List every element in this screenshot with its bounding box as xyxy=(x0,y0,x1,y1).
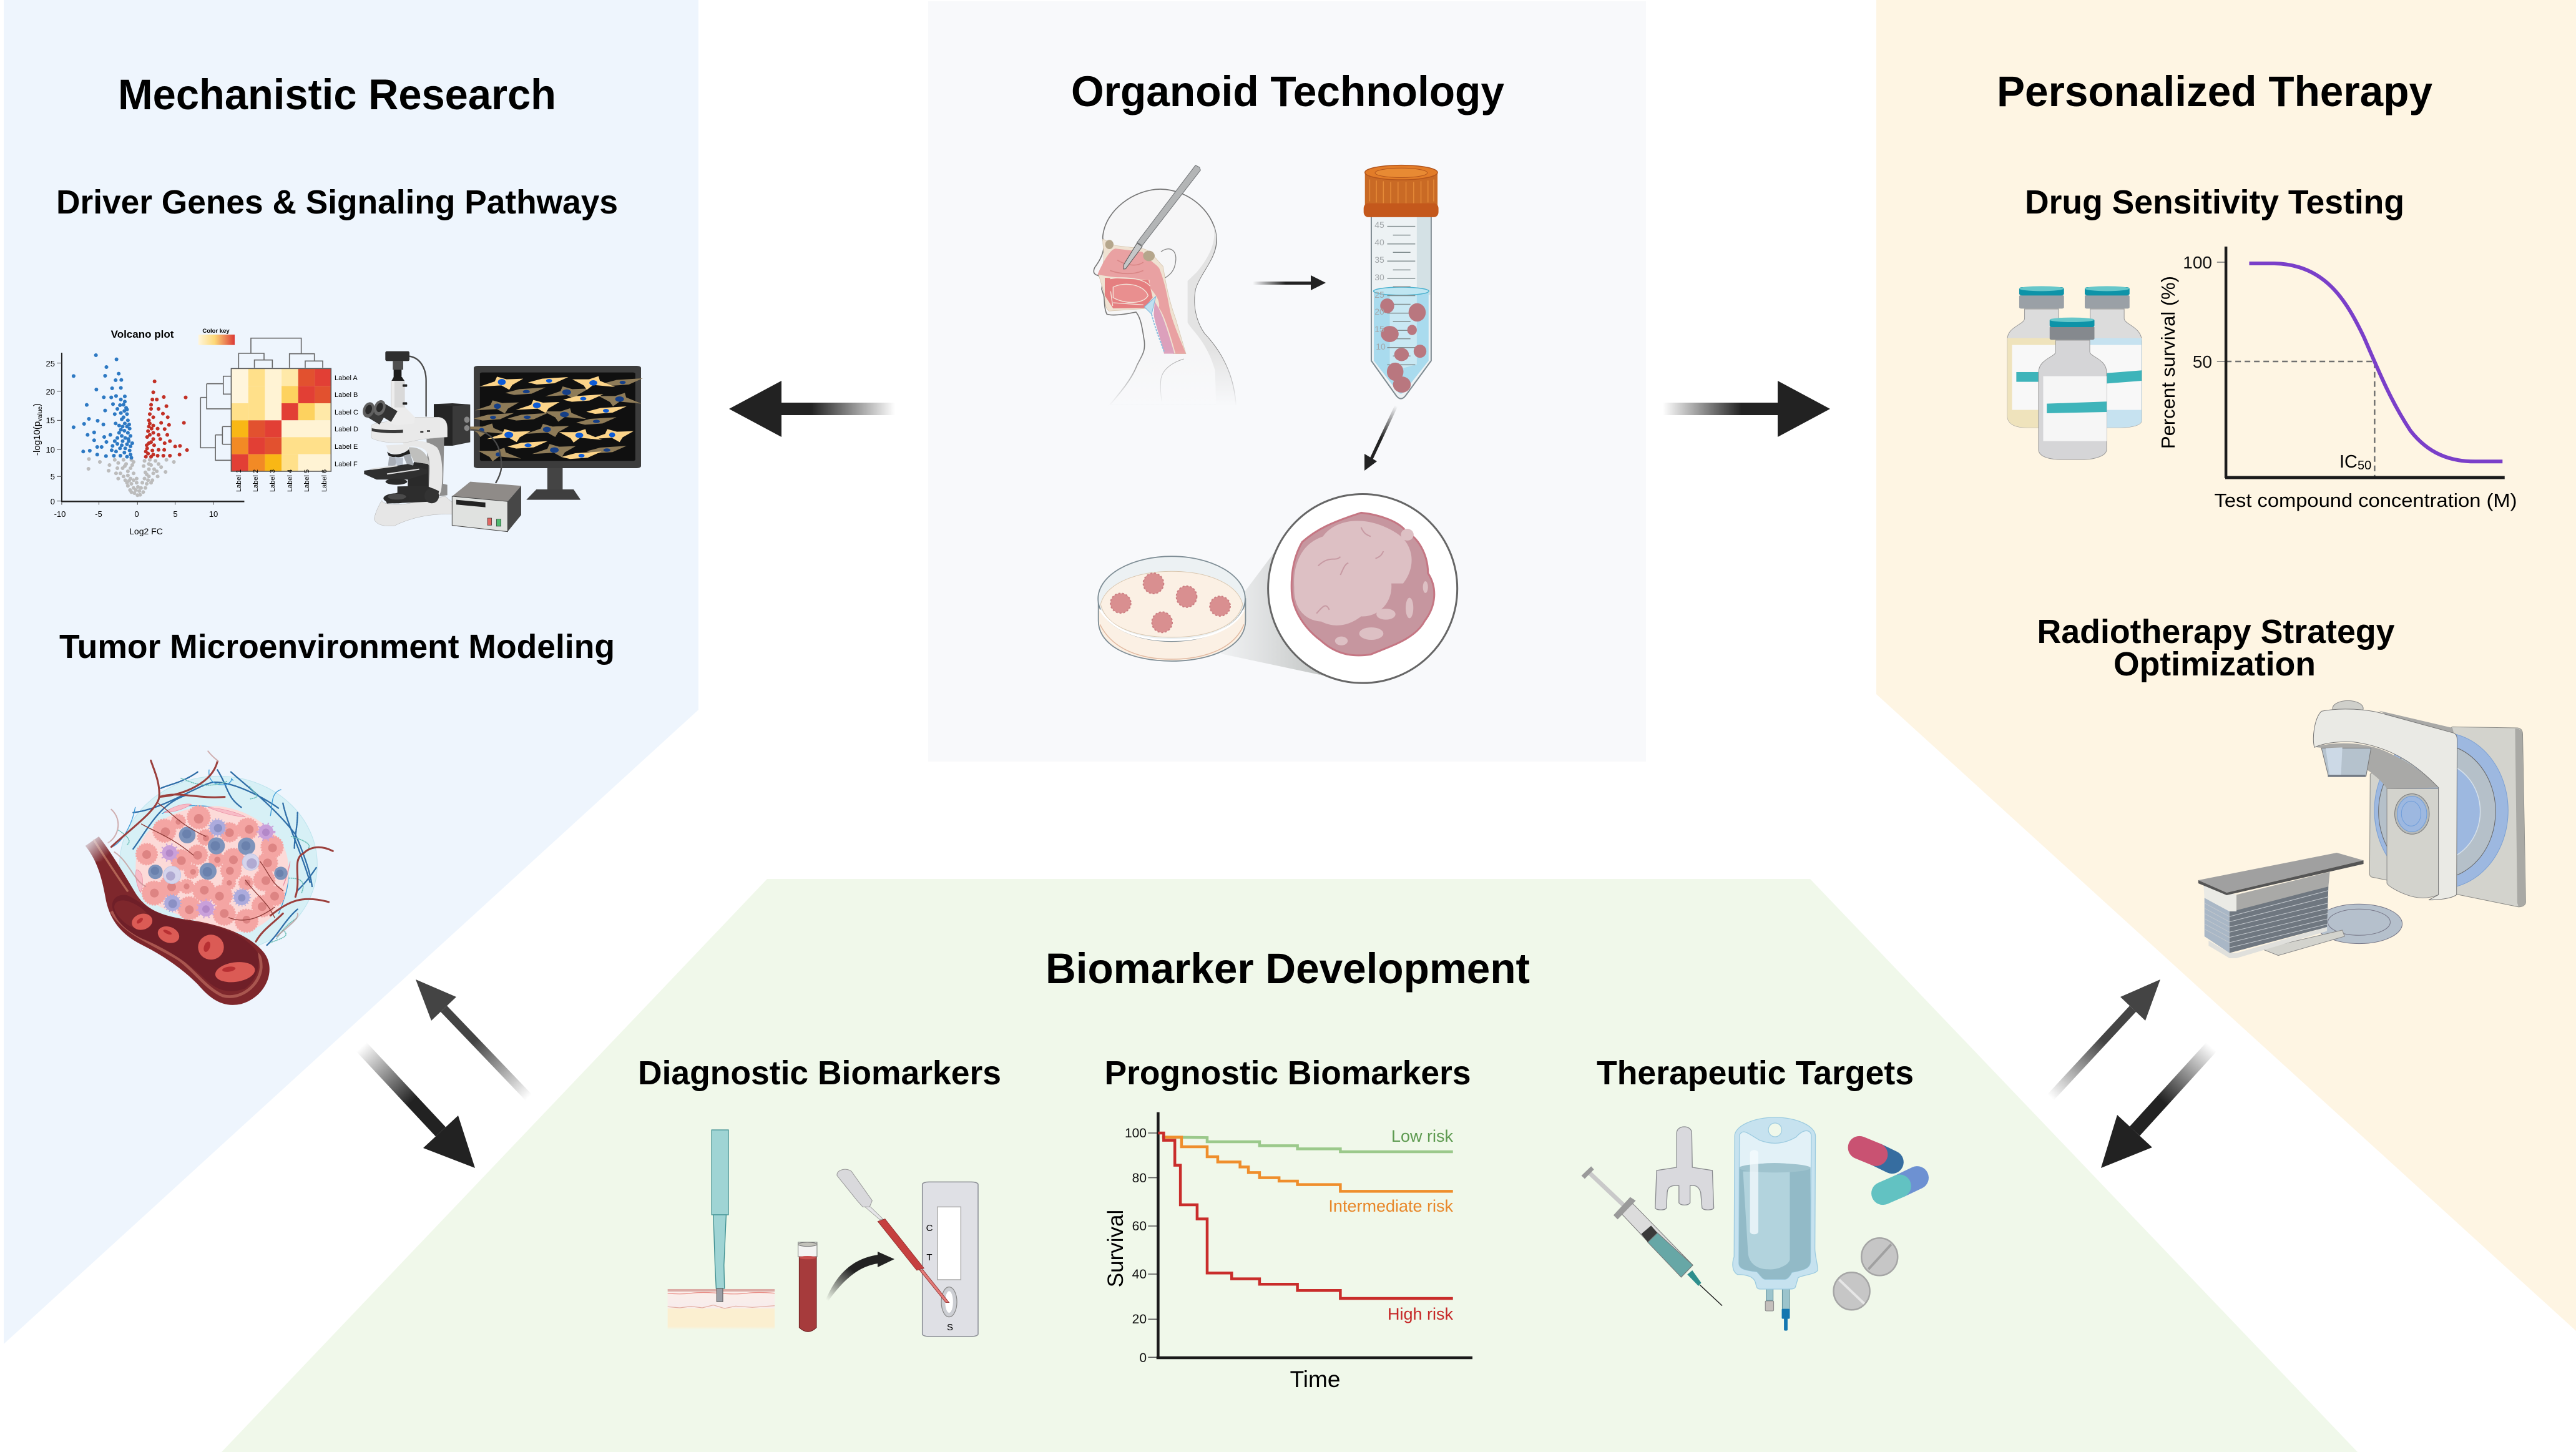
labels: heatmap rows: Label F xyxy=(335,461,358,468)
labels: tube graduations: 10 xyxy=(1376,341,1386,351)
label: color key: Color key xyxy=(202,328,230,335)
immune cells xyxy=(148,820,288,916)
dose response curve xyxy=(2249,263,2502,461)
treatment couch xyxy=(2198,853,2402,958)
magnified organoid xyxy=(1268,494,1457,683)
lamp box xyxy=(452,482,521,532)
label: volcano y axis: value xyxy=(37,406,44,421)
labels: cassette letters: C xyxy=(926,1223,933,1234)
label: high risk: High risk xyxy=(1388,1305,1453,1323)
labels: heatmap rows: Label C xyxy=(335,409,358,416)
high risk curve xyxy=(1158,1133,1453,1298)
labels: tube graduations: 45 xyxy=(1374,220,1384,230)
microscope rear pillar xyxy=(426,436,448,496)
stage xyxy=(364,464,428,485)
labels: heatmap columns: Label 1 xyxy=(235,469,243,492)
label: survival ticks: 40 xyxy=(1132,1267,1147,1282)
arrow: biomarker to personalized therapy xyxy=(2050,979,2160,1097)
label: volcano x ticks: 0 xyxy=(134,509,139,519)
lens xyxy=(2395,794,2429,834)
labels: heatmap columns: Label 2 xyxy=(252,469,260,492)
label: volcano y ticks: 25 xyxy=(46,359,55,368)
label: y ticks: 50 xyxy=(2193,352,2212,371)
icon: lateral flow test cassette xyxy=(837,1169,978,1337)
magnification cone xyxy=(1221,551,1328,677)
panel: organoid technology background xyxy=(928,1,1646,762)
arrow: biopsy to tube xyxy=(1253,275,1326,290)
arrow: blood to test xyxy=(826,1252,894,1301)
dark stage column xyxy=(408,462,429,491)
label: survival ticks: 0 xyxy=(1139,1351,1147,1365)
microscope base xyxy=(374,496,453,526)
label: survival ticks: 20 xyxy=(1132,1312,1147,1327)
label: x axis: Test compound concentration (M) xyxy=(2215,489,2517,511)
illustration: conical centrifuge tube xyxy=(1364,165,1439,399)
arrow: tube to dish xyxy=(1364,406,1396,471)
pipette xyxy=(837,1169,949,1303)
chart: drug dose response xyxy=(2158,247,2517,511)
label: y axis: Percent survival (%) xyxy=(2158,276,2179,449)
labels: heatmap rows: Label D xyxy=(335,426,358,433)
blood vessel xyxy=(83,835,270,1005)
label: IC50: IC xyxy=(2339,452,2358,472)
labels: heatmap rows: Label A xyxy=(335,375,358,382)
heatmap cells xyxy=(231,368,331,471)
collimator head xyxy=(2313,700,2457,900)
label: survival ticks: 60 xyxy=(1132,1219,1147,1234)
illustration: drug vials xyxy=(2007,286,2142,459)
low risk curve xyxy=(1165,1137,1453,1152)
vial blue xyxy=(2075,286,2142,428)
label: volcano y ticks: 10 xyxy=(46,445,55,454)
label: volcano x ticks xyxy=(54,509,218,519)
subheading: Drug Sensitivity Testing: Drug Sensitivity Testing xyxy=(2025,184,2404,221)
chart: volcano plot xyxy=(32,328,244,536)
label: volcano x ticks: -5 xyxy=(95,509,102,519)
capillaries xyxy=(108,751,333,941)
vial front xyxy=(2039,318,2107,459)
label: IC50: 50 xyxy=(2358,459,2371,473)
label: volcano y ticks: 0 xyxy=(51,497,55,506)
gantry column xyxy=(2387,788,2439,898)
label: survival ticks: 80 xyxy=(1132,1171,1147,1185)
tumor cells xyxy=(136,806,284,932)
arrow: mechanistic research to biomarker xyxy=(361,1047,475,1168)
labels: heatmap columns: Label 6 xyxy=(321,469,328,492)
labels: heatmap columns: Label 5 xyxy=(303,469,311,492)
labels: cassette letters: T xyxy=(926,1252,933,1263)
label: intermediate risk: Intermediate risk xyxy=(1328,1197,1453,1215)
illustration: culture dish with magnified organoid xyxy=(1098,494,1457,683)
gantry back plate xyxy=(2369,727,2525,907)
nasal spray tip xyxy=(1655,1127,1714,1210)
illustration: tumor microenvironment xyxy=(83,751,333,1005)
label: y ticks: 100 xyxy=(2183,253,2212,272)
labels: tube graduations: 20 xyxy=(1374,307,1384,316)
label: volcano y ticks: 15 xyxy=(46,416,55,425)
panel: personalized therapy background xyxy=(1876,0,2576,1331)
labels: heatmap columns: Label 4 xyxy=(286,469,294,492)
objective turret xyxy=(386,444,414,469)
arrow: organoid to mechanistic research xyxy=(729,381,895,437)
subheading: Diagnostic Biomarkers: Diagnostic Biomarkers xyxy=(638,1054,1001,1092)
labels: cassette letters xyxy=(926,1223,953,1333)
labels: tube graduations: 30 xyxy=(1374,272,1384,282)
vial yellow xyxy=(2007,286,2074,428)
label: volcano x ticks: 10 xyxy=(209,509,218,519)
subheading: Tumor Microenvironment Modeling: Tumor Microenvironment Modeling xyxy=(59,628,615,665)
labels: heatmap rows xyxy=(335,375,358,468)
color key xyxy=(198,335,235,345)
tumor stroma xyxy=(135,807,289,932)
labels: tube graduations: 35 xyxy=(1374,255,1384,265)
label: volcano y ticks xyxy=(46,359,55,506)
label: volcano x axis: Log2 FC xyxy=(129,526,163,536)
labels: tube graduations: 15 xyxy=(1374,324,1384,334)
syringe xyxy=(1582,1166,1722,1306)
subheading: Radiotherapy Strategy Optimization: Optimization xyxy=(2113,645,2316,683)
IV bag xyxy=(1733,1117,1818,1331)
heading: Mechanistic Research: Mechanistic Research xyxy=(118,71,556,119)
focus and lamp housing xyxy=(383,486,439,504)
label: volcano x ticks: 5 xyxy=(173,509,178,519)
illustration: head with biopsy scalpel xyxy=(1094,165,1238,406)
icon: monitor with fluorescent cells xyxy=(466,366,643,500)
heading: Biomarker Development: Biomarker Development xyxy=(1046,944,1530,993)
label: low risk: Low risk xyxy=(1391,1127,1453,1145)
tablets xyxy=(1834,1238,1898,1310)
labels: tube graduations xyxy=(1374,220,1386,351)
eyepieces xyxy=(368,410,383,419)
labels: heatmap columns: Label 3 xyxy=(269,469,277,492)
illustration: biopsy punch in skin xyxy=(668,1130,775,1330)
capsules xyxy=(1859,1147,1917,1194)
labels: tube graduations: 25 xyxy=(1374,290,1384,300)
label: y ticks xyxy=(2183,253,2212,371)
skin layers xyxy=(668,1289,775,1330)
labels: heatmap columns xyxy=(235,469,328,492)
label: volcano y axis: ) xyxy=(32,403,42,406)
chart: heatmap xyxy=(198,328,358,492)
heading: Organoid Technology: Organoid Technology xyxy=(1071,67,1504,115)
culture dish xyxy=(1098,556,1245,661)
subheading: Radiotherapy Strategy Optimization xyxy=(2037,613,2394,683)
label: survival ticks xyxy=(1125,1126,1147,1365)
panel: mechanistic research background xyxy=(4,0,698,1344)
illustration: radiotherapy linear accelerator xyxy=(2198,700,2525,958)
label: survival ticks: 100 xyxy=(1125,1126,1147,1141)
icon: blood tube xyxy=(798,1242,817,1332)
subheading: Driver Genes and Signaling Pathways: Driver Genes & Signaling Pathways xyxy=(56,184,618,221)
labels: cassette letters: S xyxy=(947,1322,953,1333)
label: volcano y axis: -log10(p xyxy=(32,421,42,456)
arrow: organoid to personalized therapy xyxy=(1663,381,1830,437)
arrow: biomarker to mechanistic research xyxy=(416,979,529,1097)
icon: microscope with camera and lamp box xyxy=(361,351,521,532)
labels: heatmap rows: Label B xyxy=(335,391,358,399)
label: time axis: Time xyxy=(1290,1366,1340,1392)
microscope arm xyxy=(403,441,443,496)
label: volcano x ticks: -10 xyxy=(54,509,66,519)
label: volcano y ticks: 20 xyxy=(46,387,55,396)
arrow: personalized therapy to biomarker xyxy=(2101,1047,2211,1168)
viewing tube xyxy=(391,381,405,408)
subheading: Therapeutic Targets: Therapeutic Targets xyxy=(1597,1054,1914,1092)
label: volcano y ticks: 5 xyxy=(51,472,55,481)
subheading: Radiotherapy Strategy Optimization: Radiotherapy Strategy xyxy=(2037,613,2394,650)
microscope upper body xyxy=(361,351,448,443)
external camera box xyxy=(434,403,470,446)
organoids in tube xyxy=(1380,298,1426,393)
panel: biomarker development background xyxy=(222,879,2358,1452)
camera cable xyxy=(409,356,426,416)
label: volcano plot title: Volcano plot xyxy=(111,328,174,340)
dendrograms xyxy=(200,338,323,460)
intermediate risk curve xyxy=(1162,1137,1453,1191)
illustration: therapeutic agents xyxy=(1582,1117,1917,1331)
gantry rings xyxy=(2374,732,2508,888)
chart: Kaplan-Meier survival curves xyxy=(1104,1112,1472,1392)
punch needle xyxy=(712,1130,728,1302)
labels: heatmap rows: Label E xyxy=(335,443,358,451)
scalpel xyxy=(1124,165,1200,269)
label: survival axis: Survival xyxy=(1104,1210,1128,1287)
cable to lamp box xyxy=(470,430,501,483)
labels: tube graduations: 40 xyxy=(1374,237,1384,247)
subheading: Prognostic Biomarkers: Prognostic Biomarkers xyxy=(1105,1054,1471,1092)
heading: Personalized Therapy: Personalized Therapy xyxy=(1997,67,2432,115)
extracellular fibers xyxy=(112,770,316,946)
orange cap xyxy=(1364,165,1439,217)
